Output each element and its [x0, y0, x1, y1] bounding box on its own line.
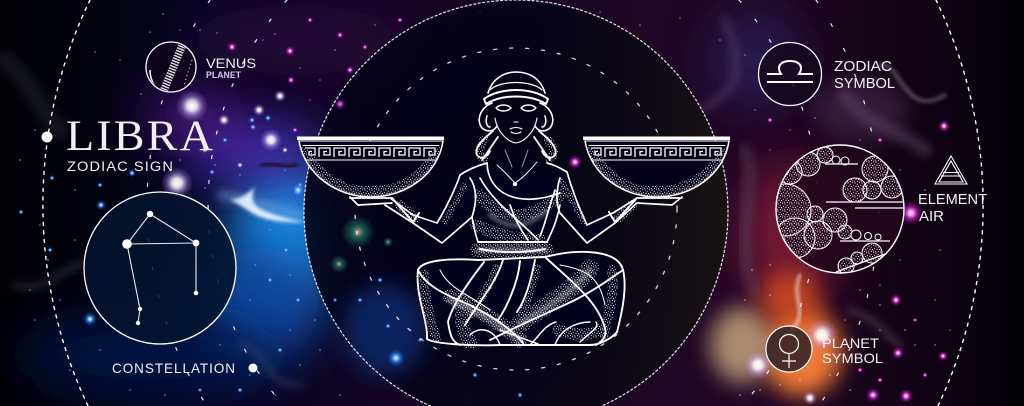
clouds — [776, 147, 902, 272]
constellation marker dot — [248, 364, 258, 372]
label: zodiac symbol — [834, 58, 895, 92]
label: zodiac symbol: SYMBOL — [834, 75, 895, 92]
neck, necklace and pendant — [497, 150, 537, 186]
label: element air — [918, 191, 987, 225]
label: planet symbol: PLANET — [822, 335, 879, 351]
head and hair — [476, 72, 556, 160]
libra woman figure holding two bowls — [297, 72, 730, 345]
label: constellation: CONSTELLATION — [112, 360, 236, 376]
subtitle: zodiac sign: ZODIAC SIGN — [67, 159, 174, 174]
title: LIBRA: LIBRA — [66, 113, 215, 160]
icon: air element triangle — [935, 156, 967, 184]
panel: constellation — [84, 192, 236, 344]
torso, drape and arms — [350, 163, 682, 260]
label: element air: AIR — [919, 208, 944, 225]
icon: venus planet medallion — [146, 42, 196, 92]
label: venus planet: VENUS — [206, 55, 256, 71]
body silhouette — [352, 163, 664, 345]
medallion: air clouds — [775, 144, 905, 274]
label: planet symbol: SYMBOL — [822, 350, 883, 366]
crossed legs and skirt — [418, 252, 625, 345]
label: element air: ELEMENT — [918, 191, 987, 208]
stipple shading on figure — [400, 140, 632, 342]
tiny stars — [95, 12, 950, 345]
icon: venus planet symbol — [766, 326, 812, 372]
left bowl — [297, 136, 444, 197]
right bowl — [583, 136, 730, 197]
label: zodiac symbol: ZODIAC — [834, 58, 892, 75]
label: planet symbol — [822, 335, 883, 366]
central dark disc — [291, 0, 728, 406]
icon: libra zodiac symbol — [758, 42, 822, 106]
label: venus planet — [206, 55, 256, 80]
left marker dot — [42, 132, 52, 142]
label: venus planet: PLANET — [206, 70, 241, 80]
